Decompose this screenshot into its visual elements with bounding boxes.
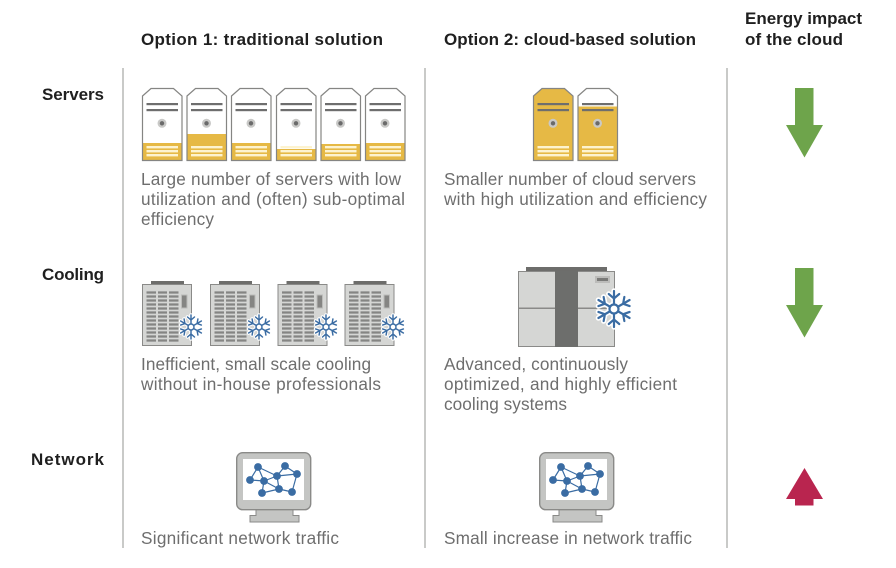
text: traditional servers: utilization and (often) sub-optimal [141,189,405,209]
text: traditional network: Significant network traffic [141,528,339,548]
heading: option 1: Option 1: traditional solution [141,30,383,49]
icon: network monitor, cloud [540,453,614,522]
text: cloud cooling [444,354,677,414]
text: cloud network: Small increase in network traffic [444,528,692,548]
text: cloud cooling: optimized, and highly efficient [444,374,677,394]
heading: energy impact: of the cloud [745,30,843,49]
heading: energy impact [745,9,862,49]
text: cloud servers: Smaller number of cloud servers [444,169,696,189]
text: traditional servers: Large number of servers with low [141,169,402,189]
arrow: servers energy down [786,88,823,158]
icon: network monitor, traditional [237,453,311,522]
column dividers [122,68,728,548]
row label: servers: Servers [42,85,104,104]
icon: large cooling system [518,267,632,347]
icon: six traditional servers [142,88,405,160]
arrow: cooling energy down [786,268,823,338]
row label: cooling: Cooling [42,265,104,284]
text: cloud cooling: Advanced, continuously [444,354,628,374]
heading: option 2: Option 2: cloud-based solution [444,30,696,49]
arrow: network energy up [786,468,823,506]
text: cloud servers: with high utilization and efficiency [443,189,707,209]
text: traditional servers: efficiency [141,209,214,229]
icon: four small cooling units [142,281,405,346]
text: traditional cooling [140,354,381,394]
text: cloud servers [443,169,707,209]
text: traditional cooling: without in-house professionals [140,374,381,394]
text: traditional servers [141,169,405,229]
icon: two cloud servers [534,88,618,160]
text: cloud cooling: cooling systems [444,394,567,414]
text: traditional cooling: Inefficient, small scale cooling [141,354,371,374]
row label: network: Network [31,450,105,469]
heading: energy impact: Energy impact [745,9,862,28]
